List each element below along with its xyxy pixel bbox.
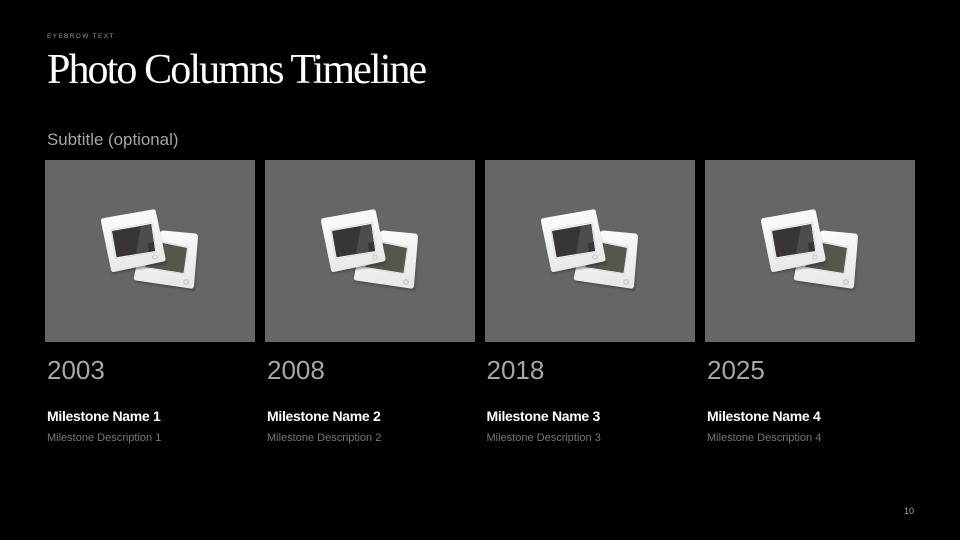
milestone name 4: Milestone Name 4: [707, 408, 820, 424]
milestone name 1: Milestone Name 1: [47, 408, 160, 424]
milestone description 3: Milestone Description 3: [486, 432, 601, 444]
milestone description 2: Milestone Description 2: [267, 432, 381, 444]
column 2: [265, 160, 475, 444]
year 4: 2025: [707, 355, 765, 385]
column 1: [45, 160, 255, 444]
page number: 10: [904, 506, 914, 516]
milestone description 1: Milestone Description 1: [47, 432, 161, 444]
column 4: [705, 160, 915, 444]
milestone description 4: Milestone Description 4: [707, 432, 821, 444]
photo placeholder 4: [705, 160, 915, 342]
column 3: [485, 160, 695, 444]
year 1: 2003: [47, 355, 105, 385]
year 2: 2008: [267, 355, 325, 385]
eyebrow: EYEBROW TEXT: [47, 33, 115, 40]
photo placeholder 2: [265, 160, 475, 342]
photo placeholder 3: [484, 160, 694, 342]
subtitle: Subtitle (optional): [47, 130, 178, 149]
title: Photo Columns Timeline: [47, 47, 425, 93]
photo placeholder 1: [45, 160, 255, 342]
milestone name 2: Milestone Name 2: [267, 408, 380, 424]
year 3: 2018: [486, 355, 544, 385]
milestone name 3: Milestone Name 3: [486, 408, 600, 424]
